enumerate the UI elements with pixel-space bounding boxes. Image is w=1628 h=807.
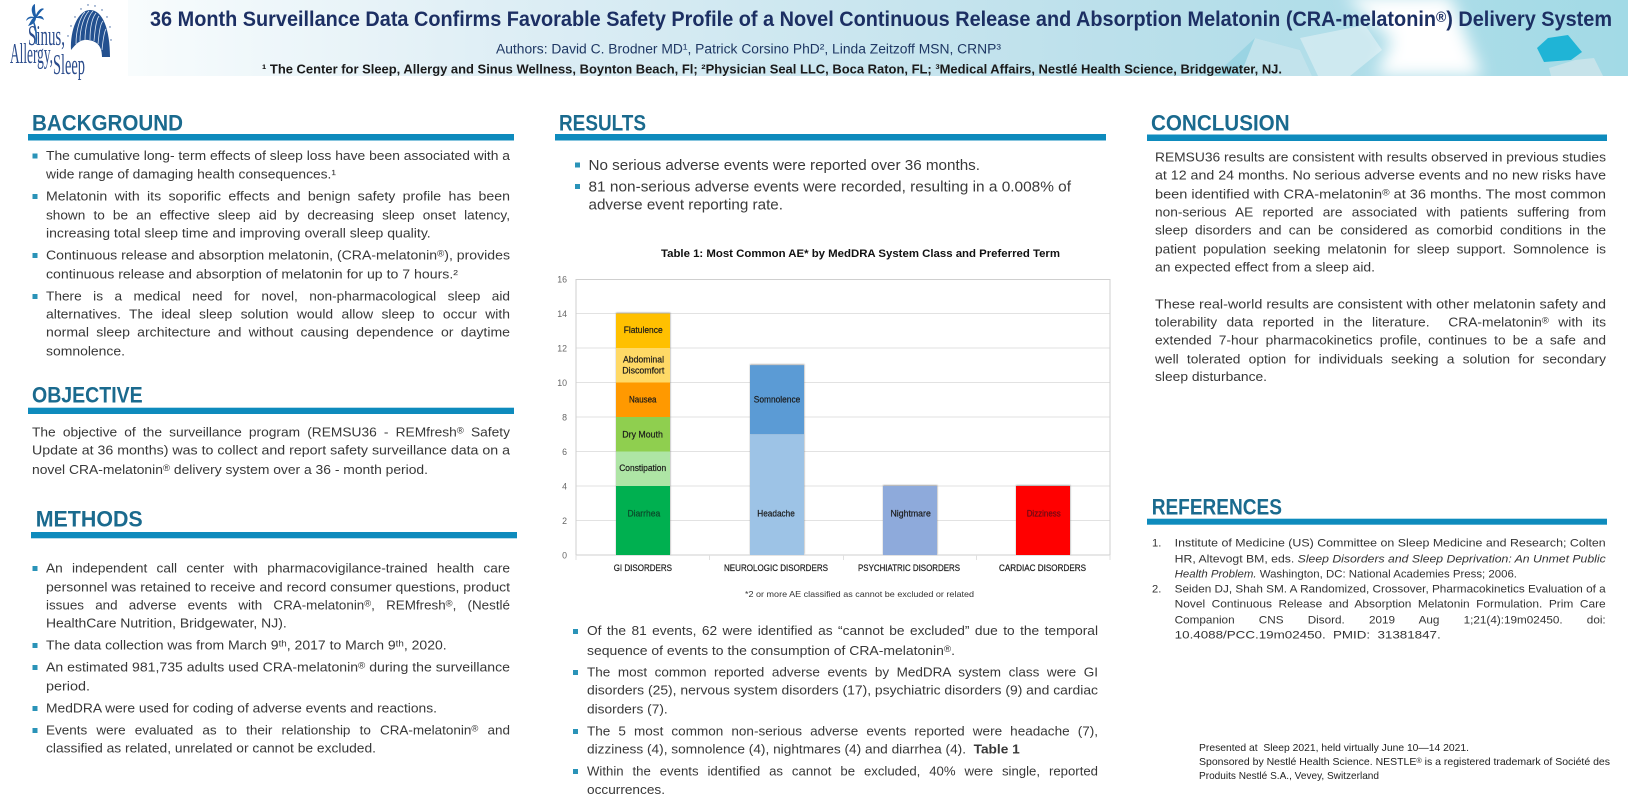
y axis labels: 4 (562, 482, 567, 492)
text block: objective: Update at 36 months) was to collect and report safety surveillance data on a (32, 444, 510, 458)
bar: GI disorders: Discomfort (622, 366, 665, 376)
logo wordmark (10, 21, 85, 81)
logo: Sinus, Allergy, Sleep (10, 4, 112, 81)
chart footnote: *2 or more AE classified as cannot be excluded or related (745, 589, 974, 599)
bullet list: methods: The data collection was from March 9 th, 2017 to March 9 th, 2020. (46, 639, 447, 653)
heading: objective (28, 383, 514, 414)
bar: psychiatric disorders (883, 486, 937, 555)
reference list: Companion CNS Disord. 2019 Aug 1;21(4):19m02450. doi: (1175, 615, 1606, 627)
bullet list: background: wide range of damaging health consequences.¹ (45, 168, 336, 182)
text block: conclusion: at 12 and 24 months. No serious adverse events and no new risks have (1155, 169, 1606, 183)
y axis labels: 12 (557, 344, 567, 354)
bullet list: methods: Events were evaluated as to their relationship to CRA-melatonin ® and (46, 723, 510, 737)
bullet list: results detail: The most common reported adverse events by MedDRA system class were GI (587, 666, 1098, 680)
panel: results (555, 111, 1110, 797)
panel: conclusion (1147, 111, 1607, 384)
bar: GI disorders: Flatulence (624, 325, 663, 335)
heading: conclusion (1147, 111, 1607, 141)
bullet list: background: increasing total sleep time and improving overall sleep quality. (46, 227, 431, 241)
bullet list: background: shown to be an effective sleep aid by decreasing sleep onset latency, (46, 209, 510, 223)
bar: GI disorders (616, 314, 670, 555)
bar: cardiac disorders: Dizziness (1027, 509, 1061, 519)
text block: conclusion: tolerability data reported in the literature. CRA-melatonin ® with its (1155, 316, 1606, 330)
bullet list: background: Continuous release and absorption melatonin, (CRA-melatonin ®), provides (46, 249, 510, 263)
bullet list: results detail: dizziness (4), somnolence (4), nightmares (4) and diarrhea (4). Table 1 (587, 743, 1020, 757)
panel: references (1147, 494, 1607, 642)
text block: conclusion: sleep disturbance. (1155, 370, 1267, 384)
bar: GI disorders: Constipation (619, 463, 666, 473)
panel: background (28, 111, 514, 359)
y axis labels: 10 (557, 378, 567, 388)
heading: results (555, 111, 1106, 140)
bullet list: background: Melatonin with its soporific effects and benign safety profile has been (46, 190, 510, 204)
reference list: 10.4088/PCC.19m02450. PMID: 31381847. (1175, 630, 1441, 642)
bullet list: background: normal sleep architecture and without causing dependence or daytime (46, 326, 510, 340)
icon: sleeping head dome (67, 4, 112, 57)
bullet list: results detail: Of the 81 events, 62 were identified as “cannot be excluded” due to the temporal (587, 624, 1098, 638)
heading: background: BACKGROUND (32, 111, 183, 136)
x axis labels: NEUROLOGIC DISORDERS (724, 563, 828, 573)
bullet list: methods: classified as related, unrelated or cannot be excluded. (46, 742, 376, 756)
header banner (128, 0, 1628, 76)
text block: conclusion: extended 7-hour pharmacokinetics profile, continues to be a safe and (1155, 334, 1606, 348)
chart title: Table 1: Most Common AE* by MedDRA System Class and Preferred Term (661, 248, 1060, 260)
heading: references (1147, 494, 1607, 525)
icon: palm tree (26, 4, 44, 44)
text block: objective: novel CRA-melatonin ® delivery system over a 36 - month period. (32, 463, 428, 477)
bullet list: methods: MedDRA were used for coding of adverse events and reactions. (46, 702, 437, 716)
heading: methods (31, 507, 517, 538)
presentation footer note: Presented at Sleep 2021, held virtually June 10—14 2021. (1199, 743, 1469, 754)
text block: conclusion: well tolerated option for individuals seeking a solution for secondary (1154, 353, 1607, 367)
bar: cardiac disorders (1016, 486, 1070, 555)
logo wordmark: Allergy, (10, 39, 53, 70)
reference list: HR, Altevogt BM, eds. Sleep Disorders and Sleep Deprivation: An Unmet Public (1175, 554, 1606, 566)
text block: conclusion: an expected effect from a sleep aid. (1155, 261, 1375, 275)
y axis labels (557, 274, 567, 560)
title: 36 Month Surveillance Data Confirms Favorable Safety Profile of a Novel Continuous Release and Absorption Melatonin (CRA-melatonin®) Delivery System (150, 7, 1612, 31)
x axis labels: GI DISORDERS (614, 563, 672, 573)
text block: conclusion: sleep disorders and can be considered as comorbid conditions in the (1155, 224, 1606, 238)
reference list: Health Problem. Washington, DC: National Academies Press; 2006. (1175, 569, 1517, 581)
heading: results: RESULTS (559, 111, 646, 136)
logo wordmark: Sleep (53, 50, 85, 81)
bar: psychiatric disorders: Nightmare (890, 509, 931, 519)
text block: conclusion: patient population seeking melatonin for sleep support. Somnolence is (1155, 243, 1606, 257)
bullet list: results detail: Within the events identified as cannot be excluded, 40% were single, reported (587, 765, 1098, 779)
bullet list: methods: personnel was retained to receive and record consumer questions, product (46, 581, 511, 595)
affiliations: ¹ The Center for Sleep, Allergy and Sinus Wellness, Boynton Beach, Fl; ²Physician Seal LLC, Boca Raton, FL; ³Medical Affairs, Nestlé Health Science, Bridgewater, NJ. (262, 61, 1282, 76)
bullet list: background: somnolence. (46, 345, 125, 359)
bullet list: background: continuous release and absorption of melatonin for up to 7 hours.² (46, 268, 458, 282)
heading: methods: METHODS (36, 507, 143, 532)
reference list (1152, 538, 1607, 642)
bullet list: key results: adverse event reporting rate. (588, 198, 783, 214)
y axis labels: 2 (562, 516, 567, 526)
x axis labels (614, 563, 1086, 573)
bullet list: methods (32, 562, 511, 756)
heading: background (28, 111, 514, 140)
bar: GI disorders: Nausea (629, 395, 656, 405)
panel: methods (31, 507, 517, 756)
x axis labels: PSYCHIATRIC DISORDERS (858, 563, 960, 573)
bullet list: background: There is a medical need for novel, non-pharmacological sleep aid (46, 290, 510, 304)
bullet list: key results (575, 158, 1072, 214)
bar: GI disorders: Abdominal (623, 355, 664, 365)
bullet list: key results: No serious adverse events were reported over 36 months. (588, 158, 980, 174)
bullet list: methods: An independent call center with pharmacovigilance-trained health care (46, 562, 510, 576)
heading: objective: OBJECTIVE (32, 383, 143, 408)
panel: objective (28, 383, 514, 477)
text block: objective (32, 426, 511, 477)
reference list: Novel Continuous Release and Absorption Melatonin Formulation. Prim Care (1175, 599, 1606, 611)
reference list: 2. (1152, 584, 1161, 596)
text block: conclusion: been identified with CRA-melatonin ® at 36 months. The most common (1155, 187, 1606, 201)
text block: conclusion: These real-world results are consistent with other melatonin safety and (1155, 298, 1606, 312)
bullet list: background: alternatives. The ideal sleep solution would allow sleep to occur with (46, 308, 510, 322)
bullet list: background: The cumulative long- term effects of sleep loss have been associated with a (46, 149, 510, 163)
bullet list: background (32, 149, 510, 359)
bar: neurologic disorders: Somnolence (754, 395, 800, 405)
logo wordmark: Sinus, (28, 21, 65, 52)
y axis labels: 8 (562, 412, 567, 422)
bullet list: results detail: disorders (7). (587, 703, 668, 717)
y axis labels: 6 (562, 447, 567, 457)
heading: references: REFERENCES (1152, 494, 1282, 519)
bullet list: results detail: The 5 most common non-serious adverse events reported were headache (7), (587, 725, 1098, 739)
bullet list: key results: 81 non-serious adverse events were recorded, resulting in a 0.008% of (588, 180, 1072, 196)
bullet list: results detail: disorders (25), nervous system disorders (17), psychiatric disorders (9) and cardiac (587, 684, 1098, 698)
reference list: Seiden DJ, Shah SM. A Randomized, Crossover, Pharmacokinetics Evaluation of a (1175, 584, 1607, 596)
bar: GI disorders: Dry Mouth (622, 429, 663, 439)
text block: conclusion: non-serious AE reported are associated with patients suffering from (1155, 206, 1606, 220)
text block: objective: The objective of the surveillance program (REMSU36 - REMfresh ® Safety (32, 426, 511, 440)
presentation footer note (1199, 743, 1610, 782)
bar: neurologic disorders: Headache (757, 509, 795, 519)
bar shadows (616, 312, 1070, 554)
bar: GI disorders: Diarrhea (628, 509, 660, 519)
heading: conclusion: CONCLUSION (1151, 111, 1290, 136)
y axis labels: 16 (557, 274, 567, 284)
bullet list: results detail: sequence of events to the consumption of CRA-melatonin ®. (587, 644, 955, 658)
text block: conclusion (1154, 151, 1607, 384)
x axis labels: CARDIAC DISORDERS (999, 563, 1086, 573)
y axis labels: 14 (557, 309, 567, 319)
presentation footer note: Produits Nestlé S.A., Vevey, Switzerland (1199, 771, 1379, 782)
bullet list: results detail (573, 624, 1098, 797)
bullet list: results detail: occurrences. (587, 783, 665, 797)
bar: neurologic disorders (750, 365, 804, 555)
reference list: Institute of Medicine (US) Committee on Sleep Medicine and Research; Colten (1175, 538, 1606, 550)
stacked bar chart (557, 274, 1110, 573)
authors: Authors: David C. Brodner MD¹, Patrick Corsino PhD², Linda Zeitzoff MSN, CRNP³ (496, 41, 1002, 56)
bullet list: methods: period. (46, 680, 90, 694)
bullet list: methods: HealthCare Nutrition, Bridgewater, NJ). (46, 617, 287, 631)
bullet list: methods: issues and adverse events with CRA-melatonin ®, REMfresh ®, (Nestlé (46, 599, 510, 613)
reference list: 1. (1152, 538, 1161, 550)
y axis labels: 0 (562, 550, 567, 560)
bullet list: methods: An estimated 981,735 adults used CRA-melatonin ® during the surveillance (46, 661, 510, 675)
text block: conclusion: REMSU36 results are consistent with results observed in previous studies (1155, 151, 1606, 165)
presentation footer note: Sponsored by Nestlé Health Science. NESTLE ® is a registered trademark of Société des (1199, 757, 1610, 768)
